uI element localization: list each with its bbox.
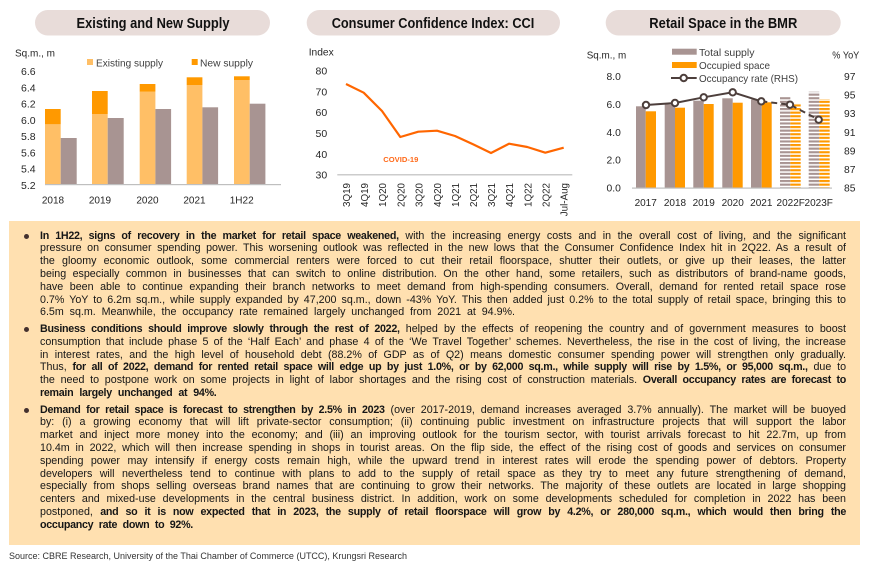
callout: COVID-19: COVID-19: [383, 155, 418, 164]
bar chart: supply and occupied: [632, 92, 832, 189]
heading: consumer confidence index: [307, 10, 560, 36]
x axis labels: 3Q20: [414, 182, 426, 207]
paragraph lines: consumption that include phase 5 of the ‘Half Each’ and phase 4 of the ‘We Travel Together’ schemes. Nevertheless, the rise in the cost of living, the increase: [40, 336, 846, 348]
paragraph lines: 10.4m in 2022, which will then increase spending in shops in tourist areas. On the flip side, the effect of the rising cost of goods and services on consumer: [40, 442, 846, 454]
text block: demand forecast 2023: [24, 404, 846, 531]
y axis labels: 6.2: [21, 99, 36, 111]
heading: retail space in the BMR: [606, 10, 841, 36]
y axis labels: 40: [316, 149, 327, 161]
y axis labels: 30: [316, 170, 327, 182]
left y axis labels: 8.0: [606, 72, 621, 83]
x axis labels: 2018: [42, 196, 65, 207]
x axis labels: [42, 196, 254, 207]
y axis labels: 6.0: [21, 115, 36, 127]
legend: Total supply: [699, 47, 755, 59]
left y axis labels: 0.0: [606, 183, 621, 194]
y axis labels: 80: [316, 66, 327, 78]
bullet: [24, 327, 29, 332]
x axis labels: 3Q19: [342, 183, 353, 207]
panel: existing and new supply: [15, 10, 281, 207]
right y axis labels: 91: [844, 128, 856, 139]
legend: [87, 57, 254, 69]
right y axis labels: 95: [844, 91, 856, 102]
x axis labels: 2020: [722, 198, 744, 209]
source note: Source: CBRE Research, University of the Thai Chamber of Commerce (UTCC), Krungsri Research: [9, 551, 407, 561]
y axis labels: 5.4: [21, 164, 36, 176]
x axis labels: 4Q20: [433, 182, 444, 207]
text block: business conditions: [24, 323, 846, 399]
paragraph lines: 6.5m sq.m. Meanwhile, the occupancy rate remained largely unchanged from 2021 at 94.9%.: [40, 306, 515, 318]
right y axis labels: 89: [844, 146, 856, 157]
x axis labels: 3Q21: [487, 183, 498, 207]
left y axis labels: [606, 72, 621, 194]
stacked bar chart: [45, 76, 281, 185]
left y axis labels: 4.0: [606, 128, 621, 139]
legend: Occupied space: [699, 60, 770, 72]
paragraph lines: [40, 230, 846, 318]
left y axis labels: 6.0: [606, 100, 621, 111]
axis line: [337, 174, 572, 175]
x axis labels: 2021: [183, 196, 206, 207]
heading: retail space in the BMR: Retail Space in the BMR: [649, 16, 798, 32]
x axis labels: 2019: [89, 196, 112, 207]
right y axis labels: [844, 72, 856, 194]
x axis labels: 2021: [750, 198, 773, 209]
line chart: occupancy rate: [643, 89, 822, 123]
line chart: CCI: [346, 84, 564, 153]
x axis labels: Jul-Aug: [560, 183, 570, 216]
x axis labels: 2Q20: [396, 182, 408, 207]
x axis labels: 4Q19: [360, 183, 371, 207]
x axis labels: 2017: [635, 198, 657, 209]
bullet: [24, 234, 29, 238]
right y axis labels: 93: [844, 109, 856, 120]
y axis labels: [21, 66, 36, 192]
paragraph lines: [40, 404, 846, 531]
x axis labels: 2022F: [777, 198, 805, 209]
paragraph lines: [40, 323, 846, 399]
x axis labels: 2020: [136, 196, 159, 207]
x axis labels: 1Q22: [524, 183, 534, 207]
x axis labels: 2Q22: [542, 183, 552, 207]
panel: consumer confidence index: [307, 10, 572, 216]
x axis labels: 2018: [664, 198, 687, 209]
paragraph lines: In 1H22, signs of recovery in the market for retail space weakened, with the increasing energy costs and in the overall cost of living, and the significant: [40, 230, 846, 242]
panel: commentary text: [9, 221, 860, 545]
x axis labels: [635, 198, 833, 209]
panel: retail space in the BMR: [587, 10, 859, 209]
bullet: [24, 408, 29, 412]
paragraph lines: occupancy rate down to 92%.: [40, 519, 193, 531]
left axis unit label: Sq.m., m: [587, 50, 626, 62]
y axis labels: 50: [316, 128, 327, 140]
paragraph lines: 0.7% YoY to 6.2m sq.m., while supply expanded by 47,200 sq.m., down -43% YoY. This then added just 0.2% to the total supply of retail space, bringing this to: [40, 294, 846, 306]
paragraph lines: postponed, and so it is now expected that in 2023, the supply of retail floorspace will grow by 4.2%, or 280,000 sq.m., which would then bring the: [40, 506, 846, 518]
paragraph lines: developers will nevertheless tend to continue with plans to add to the supply of retail space as they try to meet any future strengthening of demand,: [40, 468, 846, 480]
heading: consumer confidence index: Consumer Confidence Index: CCI: [332, 16, 534, 32]
heading: existing and new supply: Existing and New Supply: [76, 16, 230, 32]
y axis labels: 5.2: [21, 180, 36, 192]
y axis labels: 6.4: [21, 82, 36, 94]
right y axis labels: 87: [844, 165, 856, 176]
y axis labels: 60: [316, 107, 327, 119]
text block: recovery weakened: [24, 230, 846, 318]
x axis labels: 1H22: [230, 196, 254, 207]
x axis labels: 1Q21: [451, 183, 462, 207]
x axis labels: 2019: [693, 198, 715, 209]
right axis unit label: % YoY: [832, 50, 859, 62]
right y axis labels: 97: [844, 72, 856, 83]
x axis labels: 4Q21: [505, 183, 516, 207]
y axis labels: 5.8: [21, 131, 36, 143]
axis unit label: Sq.m., m: [15, 48, 55, 60]
paragraph lines: Thus, for all of 2022, demand for rented retail space will edge up by just 1.0%, or by 62,000 sq.m., while supply will rise by 1.5%, or 95,000 sq.m., due to: [40, 361, 846, 373]
paragraph lines: Demand for retail space is forecast to strengthen by 2.5% in 2023 (over 2017-2019, demand increases averaged 3.7% annually). The market will be buoyed: [40, 404, 846, 416]
y axis labels: [316, 66, 327, 182]
x axis labels: 2023F: [805, 198, 833, 209]
paragraph lines: pressure on consumer spending power. This worsening outlook was reflected in the new lows that the Consumer Confidence Index hit in 2Q22. As a result of: [40, 242, 846, 254]
axis unit label: Index: [309, 46, 334, 58]
paragraph lines: centers and mixed-use developments in the central business district. In addition, work on some developments scheduled for completion in 2022 has been: [40, 493, 846, 505]
paragraph lines: especially from shops selling overseas brand names that are continuing to grow their networks. The majority of these outlets are located in large shopping: [40, 480, 846, 492]
heading: existing and new supply: [35, 10, 270, 36]
paragraph lines: Business conditions should improve slowly through the rest of 2022, helped by the effects of reopening the country and of government measures to boost: [40, 323, 846, 335]
paragraph lines: remain largely unchanged at 94%.: [40, 387, 216, 399]
paragraph lines: by: (i) a growing economy that will lift private-sector consumption; (ii) continuing public investment on infrastructure projects that will support the labor: [40, 416, 846, 428]
paragraph lines: in interest rates, and the high level of household debt (88.2% of GDP as of Q2) means domestic consumer spending power will strengthen only gradually.: [40, 349, 846, 361]
legend: Occupancy rate (RHS): [699, 73, 798, 85]
left y axis labels: 2.0: [606, 156, 621, 167]
x axis labels: [342, 182, 570, 216]
paragraph lines: market and inject more money into the economy; and (iii) an improving outlook for the tourism sector, with tourist arrivals forecast to hit 22.7m, up from: [40, 429, 846, 441]
y axis labels: 6.6: [21, 66, 36, 78]
x axis labels: 1Q20: [378, 182, 389, 207]
legend: New supply: [200, 57, 254, 69]
paragraph lines: being especially common in businesses that can switch to online distribution. On the other hand, some retailers, such as distributors of brand-name goods,: [40, 268, 846, 280]
y axis labels: 5.6: [21, 147, 36, 159]
x axis labels: 2Q21: [469, 183, 480, 207]
paragraph lines: spending power may intensify if energy costs remain high, while the upward trend in interest rates will erode the spending power of debtors. Property: [40, 455, 846, 467]
legend: Existing supply: [96, 57, 164, 69]
paragraph lines: the need to postpone work on some projects in light of labor shortages and the rising cost of construction materials. Overall occupancy rates are forecast to: [40, 374, 846, 386]
paragraph lines: the gloomy economic outlook, some commercial renters were forced to cut their retail floorspace, shutter their outlets, or give up their leases, the latter: [40, 255, 846, 267]
legend: [671, 47, 798, 85]
right y axis labels: 85: [844, 183, 856, 194]
y axis labels: 70: [316, 86, 327, 98]
paragraph lines: have been able to continue expanding their branch networks to meet demand from high-spending consumers. Overall, demand for rented retail space rose: [40, 281, 846, 293]
